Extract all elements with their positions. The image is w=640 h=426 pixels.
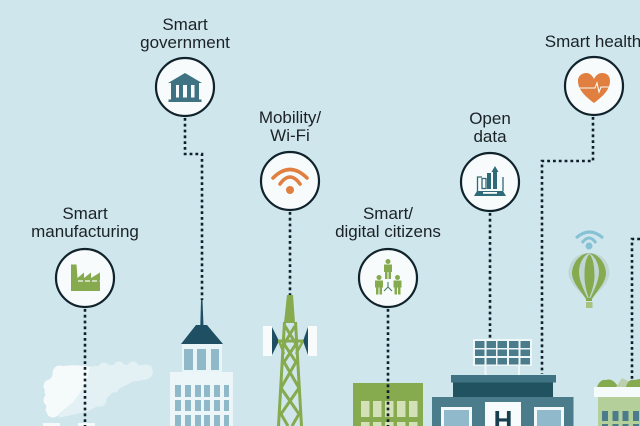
factory smoke bbox=[43, 363, 151, 426]
label: open data: data bbox=[473, 127, 507, 146]
government building bbox=[170, 300, 233, 426]
icon: wifi bbox=[273, 170, 307, 194]
icon: laptop chart bbox=[474, 166, 506, 196]
icon: government columns bbox=[168, 73, 202, 102]
node: open data bbox=[461, 109, 519, 211]
node: smart health bbox=[545, 32, 640, 115]
mobile tower bbox=[263, 295, 317, 426]
label: smart government: Smart bbox=[162, 15, 208, 34]
wifi hot-air balloon bbox=[568, 232, 610, 308]
connector: health bbox=[542, 117, 593, 374]
icon: heart with pulse bbox=[578, 73, 610, 103]
label: mobility wi-fi: Mobility/ bbox=[259, 108, 321, 127]
connector: right edge building bbox=[632, 239, 640, 379]
connector: manufacturing bbox=[84, 309, 86, 426]
label: mobility wi-fi: Wi-Fi bbox=[270, 126, 310, 145]
label: smart digital citizens: digital citizens bbox=[335, 222, 441, 241]
label: smart health: Smart health bbox=[545, 32, 640, 51]
node: mobility wi-fi bbox=[259, 108, 321, 210]
hospital bbox=[432, 375, 574, 426]
connector: open data bbox=[489, 213, 491, 339]
icon: connected people bbox=[375, 259, 402, 294]
solar panel bbox=[473, 339, 532, 375]
label: smart government: government bbox=[140, 33, 230, 52]
node: smart government bbox=[140, 15, 230, 116]
icon: factory bbox=[71, 264, 100, 291]
connector: citizens bbox=[387, 309, 389, 426]
label: open data: Open bbox=[469, 109, 511, 128]
label: smart manufacturing: manufacturing bbox=[31, 222, 139, 241]
label: smart manufacturing: Smart bbox=[62, 204, 108, 223]
green roof building bbox=[594, 378, 640, 426]
connector: government bbox=[185, 118, 202, 300]
node: smart manufacturing bbox=[31, 204, 139, 307]
label: smart digital citizens: Smart/ bbox=[363, 204, 413, 223]
node: smart digital citizens bbox=[335, 204, 441, 307]
connector: mobility bbox=[289, 212, 291, 295]
green office building bbox=[353, 383, 423, 426]
